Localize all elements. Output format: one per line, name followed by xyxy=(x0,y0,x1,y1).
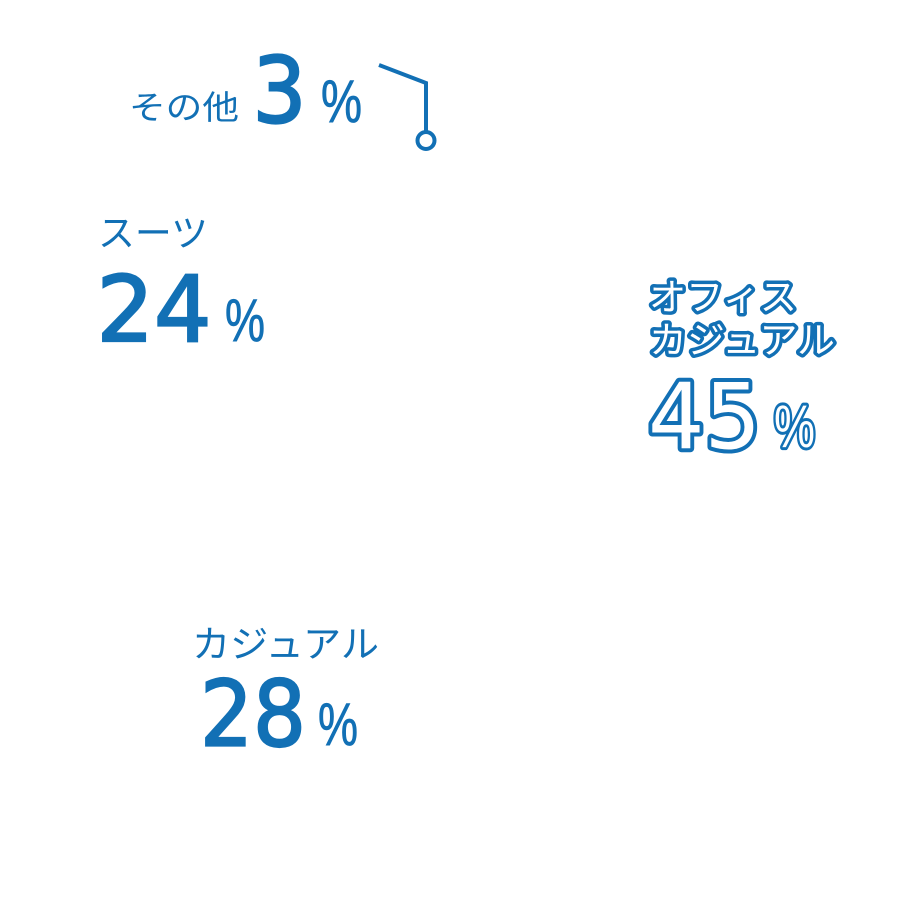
label: other 3%: 3 xyxy=(252,39,306,144)
label: suit 24% xyxy=(96,213,265,363)
label: office casual 45%: カジュアル xyxy=(649,320,835,361)
label: casual 28% xyxy=(192,624,379,768)
label: suit 24%: スーツ xyxy=(98,213,208,254)
label: other 3% xyxy=(129,39,362,144)
label: casual 28%: % xyxy=(318,691,358,758)
label: suit 24%: % xyxy=(225,287,265,354)
label: other 3%: % xyxy=(321,68,362,135)
label: office casual 45%: 45 xyxy=(648,365,761,470)
label: suit 24%: 24 xyxy=(96,258,212,363)
label: casual 28%: カジュアル xyxy=(192,624,379,665)
label: casual 28%: 28 xyxy=(200,662,306,768)
label: office casual 45%: オフィス xyxy=(649,277,797,318)
label: other 3%: その他 xyxy=(129,89,239,126)
leader line with circle marker xyxy=(379,65,434,149)
label: office casual 45%: % xyxy=(774,393,815,460)
label: office casual 45% xyxy=(648,277,835,470)
